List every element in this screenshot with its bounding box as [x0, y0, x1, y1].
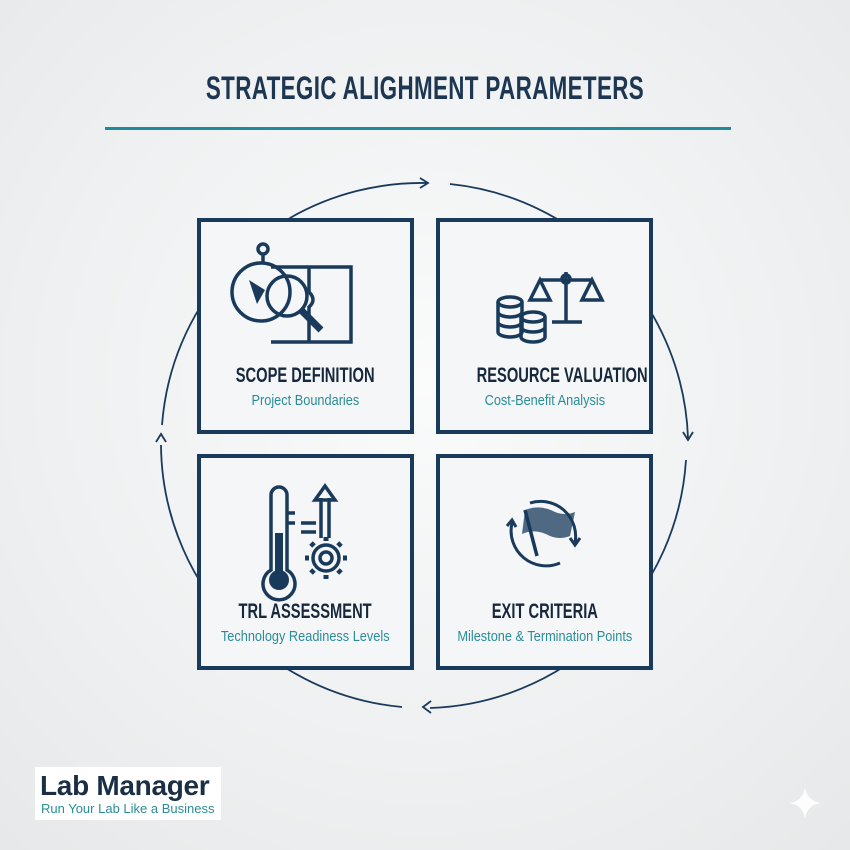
title: STRATEGIC ALIGHMENT PARAMETERS — [206, 70, 644, 106]
icon: sparkle — [790, 788, 820, 818]
subtitle: Cost-Benefit Analysis — [484, 392, 605, 409]
icon: coins and scale — [496, 272, 605, 344]
heading: EXIT CRITERIA — [491, 600, 598, 623]
logo: Lab Manager — [35, 767, 221, 820]
heading: SCOPE DEFINITION — [236, 364, 375, 387]
icon: compass and magnifier — [230, 242, 353, 344]
logo: Lab Manager: Lab Manager — [40, 770, 209, 801]
subtitle: Project Boundaries — [252, 392, 359, 409]
logo: Lab Manager: Run Your Lab Like a Business — [41, 801, 214, 816]
title underline — [105, 127, 731, 130]
icon: thermometer, arrow, gear — [261, 483, 347, 602]
icon: checkered flag with cycle arrows — [506, 500, 582, 568]
heading: TRL ASSESSMENT — [239, 600, 372, 623]
panel: TRL assessment — [197, 454, 414, 670]
heading: RESOURCE VALUATION — [477, 364, 648, 387]
panel: exit criteria — [436, 454, 653, 670]
panel: resource valuation — [436, 218, 653, 434]
subtitle: Technology Readiness Levels — [221, 628, 390, 645]
panel: scope definition — [197, 218, 414, 434]
subtitle: Milestone & Termination Points — [457, 628, 632, 645]
